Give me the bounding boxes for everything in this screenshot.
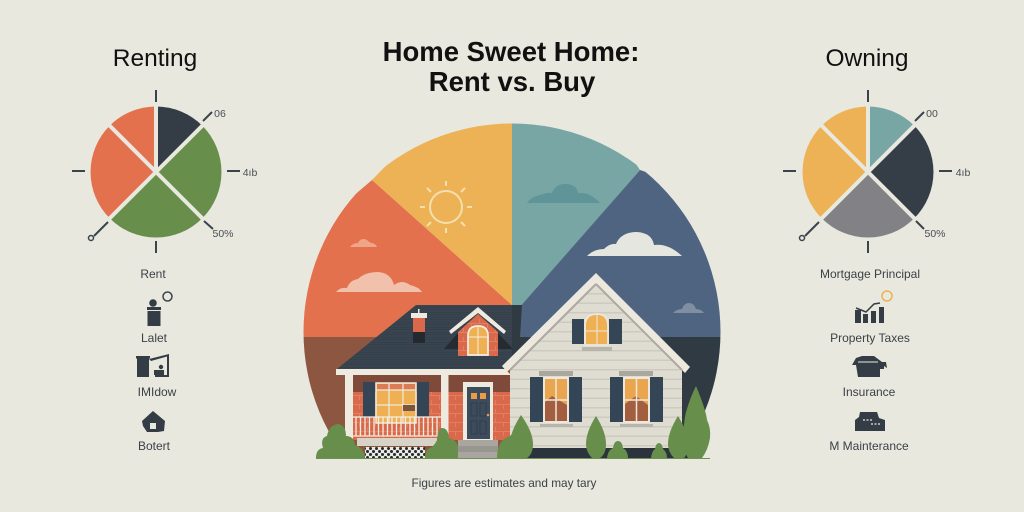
slice: blue (512, 170, 730, 337)
icon: rising bars (855, 291, 892, 323)
cloud: small blue slice (673, 303, 704, 313)
chimney (411, 309, 427, 343)
porch railing (353, 417, 441, 436)
band: lower left (290, 337, 512, 459)
slice: teal (512, 110, 640, 305)
right house: sided gable (502, 273, 700, 458)
heading: renting: Renting (113, 45, 197, 72)
band: lower right (512, 305, 720, 427)
pie chart: owning (783, 90, 970, 253)
panel: sky semicircle (290, 110, 730, 459)
icon: window (136, 354, 169, 377)
lower left window (530, 371, 582, 427)
gable shadow (510, 284, 682, 370)
cloud: large orange slice (336, 272, 422, 292)
pie chart: renting: 50% (212, 228, 234, 240)
label: rent: Rent (140, 267, 166, 281)
pie chart: owning: 50% (924, 228, 946, 240)
label: mortgage principal: Mortgage Principal (820, 267, 920, 281)
left house: bungalow (336, 305, 513, 458)
foundation (510, 448, 700, 458)
icon: maintenance (855, 412, 885, 431)
pie chart: renting (72, 90, 257, 253)
lattice (365, 447, 425, 458)
roof (337, 305, 512, 369)
pie chart: owning: 4ıb (956, 167, 970, 179)
wall (353, 375, 511, 440)
icon: house badge (142, 411, 165, 432)
icon: insurance (852, 356, 887, 377)
pie chart: renting: 4ıb (243, 167, 257, 179)
title: Rent vs. Buy (429, 66, 596, 97)
shrubs (316, 386, 710, 458)
steps (456, 440, 498, 458)
label: maintenance: M Mainterance (829, 439, 909, 453)
attic window (572, 314, 622, 351)
house illustration (316, 273, 710, 459)
wall (510, 283, 682, 448)
pie chart: owning: 00 (926, 108, 938, 120)
slice: yellow (372, 110, 512, 305)
panel: renting (72, 45, 257, 453)
dormer (444, 307, 513, 356)
footnote: Figures are estimates and may tary (412, 476, 597, 490)
label: lalet: Lalet (141, 331, 168, 345)
porch eave (336, 369, 511, 375)
cloud: teal slice (527, 184, 600, 203)
icon: lalet (147, 292, 172, 326)
heading: owning: Owning (825, 45, 909, 72)
label: insurance: Insurance (843, 385, 896, 399)
door (463, 382, 493, 440)
porch floor (357, 438, 437, 446)
cloud: blue slice (587, 232, 682, 256)
gable trim (502, 273, 690, 373)
slice: orange (290, 180, 512, 337)
title (383, 36, 639, 97)
panel: owning (783, 45, 970, 453)
porch shadow (353, 375, 511, 392)
icon: sun (420, 181, 472, 233)
lower right window (610, 371, 663, 427)
window with shutters (363, 382, 429, 423)
cloud: small orange slice (350, 239, 377, 247)
pie chart: renting: 06 (214, 108, 226, 120)
label: property taxes: Property Taxes (830, 331, 910, 345)
label: botert: Botert (138, 439, 171, 453)
label: window: IMIdow (138, 385, 177, 399)
porch columns (345, 375, 448, 439)
title: Home Sweet Home: (383, 36, 639, 67)
ground line (316, 458, 710, 459)
